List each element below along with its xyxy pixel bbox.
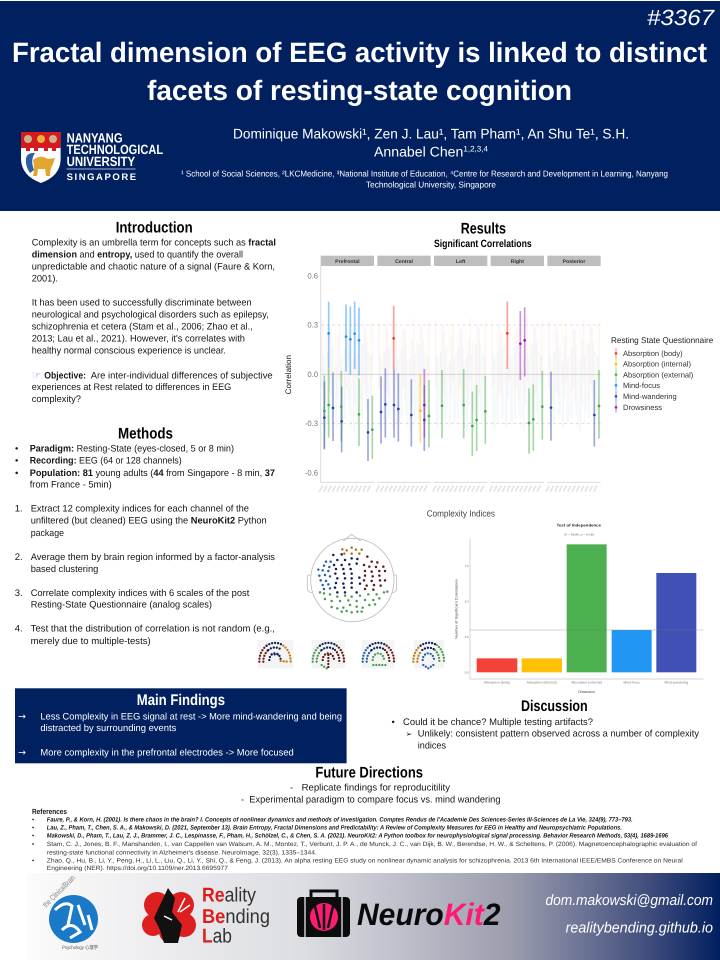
introduction text: dimension and entropy, used to quantify the overall bbox=[32, 250, 243, 261]
references: Stam, C. J., Jones, B. F., Manshanden, I., van Cappellen van Walsum, A. M., Montez, T., Verbunt, J. P. A., de Munck, J. C., van Dijk, B. W., Berendse, H. W., & Scheltens, P. (2006). Magnetoencephalographic evaluation of bbox=[47, 841, 697, 848]
objective: Are inter-individual differences of subjective bbox=[91, 370, 273, 381]
objective: ☞ bbox=[32, 370, 41, 381]
panel strips: Posterior bbox=[563, 259, 585, 264]
legend: Absorption (external) bbox=[623, 370, 693, 379]
authors: Annabel Chen bbox=[374, 144, 463, 160]
methods steps: 4. bbox=[15, 624, 23, 635]
complexity indices label: Complexity Indices bbox=[427, 509, 495, 519]
objective bbox=[32, 370, 273, 405]
logo: Reality Bending Lab bbox=[142, 885, 270, 948]
bar chart: 5.0 bbox=[465, 600, 469, 603]
introduction text: healthy normal conscious experience is unclear. bbox=[32, 346, 226, 357]
bar chart: Absorption (external) bbox=[571, 681, 602, 684]
discussion heading: Discussion bbox=[521, 698, 588, 715]
footer band bbox=[27, 873, 720, 960]
references: • bbox=[32, 824, 34, 831]
bar chart: X² = 59.86, p = 0.010 bbox=[564, 533, 594, 536]
references: Makowski, D., Pham, T., Lau, Z. J., Brammer, J. C., Lespinasse, F., Pham, H., Schölzel, C., & Chen, S. A. (2021). NeuroKit2: A Python toolbox for neurophysiological signal processing. Behavior Research Methods, 53(4), 1689-1696 bbox=[47, 832, 669, 839]
references: Faure, P., & Korn, H. (2001). Is there chaos in the brain? I. Concepts of nonlinear dynamics and methods of investigation. Comptes Rendus de l'Academie Des Sciences-Series III-Sciences de La Vie, 324(9), 773–793. bbox=[47, 817, 633, 824]
affiliations: ¹ School of Social Sciences, ²LKCMedicine, ³National Institute of Education, ⁴Centre for Research and Development in Learning, Nanyang bbox=[181, 169, 668, 179]
complexity figures bbox=[257, 524, 703, 694]
NTU logo bbox=[21, 131, 163, 183]
introduction text: Complexity is an umbrella term for concepts such as fractal bbox=[32, 238, 276, 249]
methods steps: package bbox=[31, 528, 64, 539]
bar chart: 7.5 bbox=[465, 564, 469, 568]
main findings heading: Main Findings bbox=[137, 692, 225, 709]
title: Fractal dimension of EEG activity is linked to distinct bbox=[12, 37, 707, 68]
future directions text: - bbox=[241, 795, 244, 806]
y axis labels: -0.3 bbox=[305, 419, 318, 428]
contact details bbox=[546, 892, 713, 936]
NTU logo: UNIVERSITY bbox=[67, 154, 135, 169]
bar chart: 2.5 bbox=[465, 635, 469, 639]
y axis labels: 0.0 bbox=[307, 370, 318, 379]
methods steps: unfiltered (but cleaned) EEG using the NeuroKit2 Python bbox=[31, 516, 267, 527]
authors: 1,2,3,4 bbox=[463, 145, 489, 154]
affiliations bbox=[181, 169, 668, 190]
methods steps bbox=[15, 504, 275, 647]
panel: future directions bbox=[241, 764, 500, 806]
logo: NeuroKit2 bbox=[297, 891, 500, 937]
poster number: #3367 bbox=[647, 5, 715, 30]
legend bbox=[611, 336, 713, 413]
discussion text: ➢ bbox=[406, 730, 412, 739]
bar chart: Absorption (internal) bbox=[527, 681, 557, 684]
bar chart: Number of Significant Correlations bbox=[454, 579, 458, 639]
panel: introduction bbox=[32, 219, 276, 405]
future directions text: Experimental paradigm to compare focus vs. mind wandering bbox=[249, 795, 500, 806]
methods steps: based clustering bbox=[31, 564, 98, 575]
significant points bbox=[324, 333, 599, 432]
objective: complexity? bbox=[32, 394, 81, 405]
bar chart bbox=[454, 524, 703, 694]
logo: the ClinicalBrain lab: the ClinicalBrain bbox=[41, 873, 77, 909]
methods heading: Methods bbox=[118, 425, 173, 442]
future directions text bbox=[241, 783, 500, 806]
introduction text: unpredictable and chaotic nature of a signal (Faure & Korn, bbox=[32, 262, 275, 273]
authors: Dominique Makowski¹, Zen J. Lau¹, Tam Pham¹, An Shu Te¹, S.H. bbox=[233, 126, 629, 142]
title: facets of resting-state cognition bbox=[147, 75, 572, 106]
methods steps: Extract 12 complexity indices for each channel of the bbox=[31, 504, 249, 515]
contact details: realitybending.github.io bbox=[566, 919, 713, 936]
methods steps: 2. bbox=[15, 552, 23, 563]
bar chart: Mind-wandering bbox=[664, 681, 688, 684]
introduction text: It has been used to successfully discriminate between bbox=[32, 298, 252, 309]
main findings text bbox=[18, 711, 342, 759]
main findings text: → bbox=[18, 748, 26, 759]
references: • bbox=[32, 858, 34, 865]
legend: Absorption (body) bbox=[623, 349, 683, 358]
head map bbox=[307, 534, 397, 622]
main findings text: distracted by surrounding events bbox=[40, 723, 177, 734]
main findings text: → bbox=[18, 711, 26, 722]
panel: results bbox=[257, 220, 713, 694]
references: Lau, Z., Pham, T., Chen, S. A., & Makowski, D. (2021, September 13). Brain Entropy, Fractal Dimensions and Predictability: A Review of Complexity Measures for EEG in Healthy and Neuropsychiatric Populations. bbox=[47, 824, 622, 831]
discussion text: indices bbox=[418, 740, 446, 751]
methods steps: Test that the distribution of correlation is not random (e.g., bbox=[31, 624, 275, 635]
bar chart: Test of Independence bbox=[557, 524, 601, 528]
title bbox=[12, 37, 707, 106]
methods steps: 1. bbox=[15, 504, 23, 515]
methods bullets: • bbox=[15, 468, 18, 479]
panel strips: Left bbox=[456, 259, 465, 264]
introduction text bbox=[32, 238, 276, 357]
references: • bbox=[32, 832, 34, 839]
y axis labels: 0.3 bbox=[307, 321, 318, 329]
introduction text: neurological and psychological disorders such as epilepsy, bbox=[32, 310, 269, 321]
results subheading: Significant Correlations bbox=[434, 238, 532, 250]
y axis labels: 0.6 bbox=[307, 272, 318, 280]
references: Zhao, Q., Hu, B., Li, Y., Peng, H., Li, L., Liu, Q., Li, Y., Shi, Q., & Feng, J. (2013). An alpha resting EEG study on nonlinear dynamic analysis for schizophrenia. 2013 6th International IEEE/EMBS Conference on Neural bbox=[47, 858, 683, 865]
NTU logo: TECHNOLOGICAL bbox=[67, 142, 163, 157]
significant error bars bbox=[324, 302, 599, 461]
methods steps: merely due to multiple-tests) bbox=[31, 636, 151, 647]
legend: Mind-focus bbox=[623, 381, 660, 390]
methods steps: Average them by brain region informed by a factor-analysis bbox=[31, 552, 275, 563]
methods bullets: from France - 5min) bbox=[30, 480, 112, 491]
header banner bbox=[0, 1, 720, 211]
legend: Drowsiness bbox=[623, 403, 662, 412]
methods bullets: Recording: EEG (64 or 128 channels) bbox=[30, 456, 182, 467]
panel strips bbox=[321, 256, 601, 266]
future directions text: Replicate findings for reproducitility bbox=[302, 783, 450, 794]
objective: experiences at Rest related to differences in EEG bbox=[32, 382, 231, 393]
methods bullets: • bbox=[15, 444, 18, 455]
logo: Reality Bending Lab: Reality bbox=[202, 885, 256, 907]
introduction text: 2013; Lau et al., 2021). However, it's correlates with bbox=[32, 334, 245, 345]
panel: main findings bbox=[15, 688, 347, 763]
legend: Mind-wandering bbox=[623, 392, 677, 401]
introduction heading: Introduction bbox=[116, 219, 193, 236]
main findings text: More complexity in the prefrontal electrodes -> More focused bbox=[40, 748, 294, 759]
objective: Objective: bbox=[44, 370, 86, 381]
future directions heading: Future Directions bbox=[315, 764, 423, 781]
legend: Absorption (internal) bbox=[623, 360, 691, 368]
panel: discussion bbox=[392, 698, 699, 751]
references: • bbox=[32, 841, 34, 848]
methods bullets bbox=[15, 444, 275, 491]
panel: methods bbox=[15, 425, 275, 647]
methods bullets: Paradigm: Resting-State (eyes-closed, 5 or 8 min) bbox=[30, 444, 234, 455]
3D head views bbox=[257, 640, 444, 668]
correlation chart bbox=[284, 256, 713, 492]
discussion text bbox=[392, 717, 699, 751]
future directions text: - bbox=[290, 783, 293, 794]
bar chart: Absorption (body) bbox=[484, 681, 510, 684]
bar chart: 0.0 bbox=[465, 671, 469, 674]
bar chart: Dimension bbox=[578, 690, 595, 694]
logo: the ClinicalBrain lab bbox=[41, 873, 98, 951]
methods steps: 3. bbox=[15, 588, 23, 599]
NTU logo: SINGAPORE bbox=[67, 172, 136, 183]
references: resting-state functional connectivity in Alzheimer's disease. NeuroImage, 32(3), 1335–1344. bbox=[47, 849, 317, 856]
panel strips: Central bbox=[395, 259, 413, 264]
logo: Reality Bending Lab: Lab bbox=[202, 926, 232, 948]
y axis labels bbox=[284, 272, 318, 477]
logo: the ClinicalBrain lab: Psychology 心理学 bbox=[62, 944, 98, 951]
bar chart: Mind-focus bbox=[624, 681, 640, 684]
discussion text: Could it be chance? Multiple testing artifacts? bbox=[403, 717, 593, 728]
introduction text: 2001). bbox=[32, 274, 58, 285]
references: Engineering (NER). https://doi.org/10.1109/ner.2013.6695977 bbox=[47, 865, 229, 872]
references bbox=[32, 807, 697, 872]
affiliations: Technological University, Singapore bbox=[366, 180, 496, 190]
methods bullets: • bbox=[15, 456, 18, 467]
logo: Reality Bending Lab: Bending bbox=[202, 906, 270, 928]
references: References bbox=[32, 807, 67, 816]
references: • bbox=[32, 817, 34, 824]
y axis labels: Correlation bbox=[284, 355, 293, 394]
methods bullets: Population: 81 young adults (44 from Singapore - 8 min, 37 bbox=[30, 468, 275, 479]
panel strips: Prefrontal bbox=[335, 259, 360, 264]
discussion text: Unlikely: consistent pattern observed across a number of complexity bbox=[418, 729, 699, 740]
results heading: Results bbox=[461, 220, 506, 237]
y axis labels: -0.6 bbox=[305, 468, 318, 477]
methods steps: Resting-State Questionnaire (analog scales) bbox=[31, 600, 212, 611]
logo: NeuroKit2: NeuroKit2 bbox=[357, 897, 500, 932]
authors bbox=[233, 126, 629, 160]
legend: Resting State Questionnaire bbox=[611, 336, 713, 345]
methods steps: Correlate complexity indices with 6 scales of the post bbox=[31, 588, 250, 599]
main findings text: Less Complexity in EEG signal at rest -> More mind-wandering and being bbox=[40, 711, 342, 722]
discussion text: • bbox=[392, 717, 395, 728]
panel strips: Right bbox=[511, 259, 524, 264]
introduction text: schizophrenia et cetera (Stam et al., 2006; Zhao et al., bbox=[32, 322, 253, 333]
NTU logo: NANYANG bbox=[67, 131, 123, 146]
